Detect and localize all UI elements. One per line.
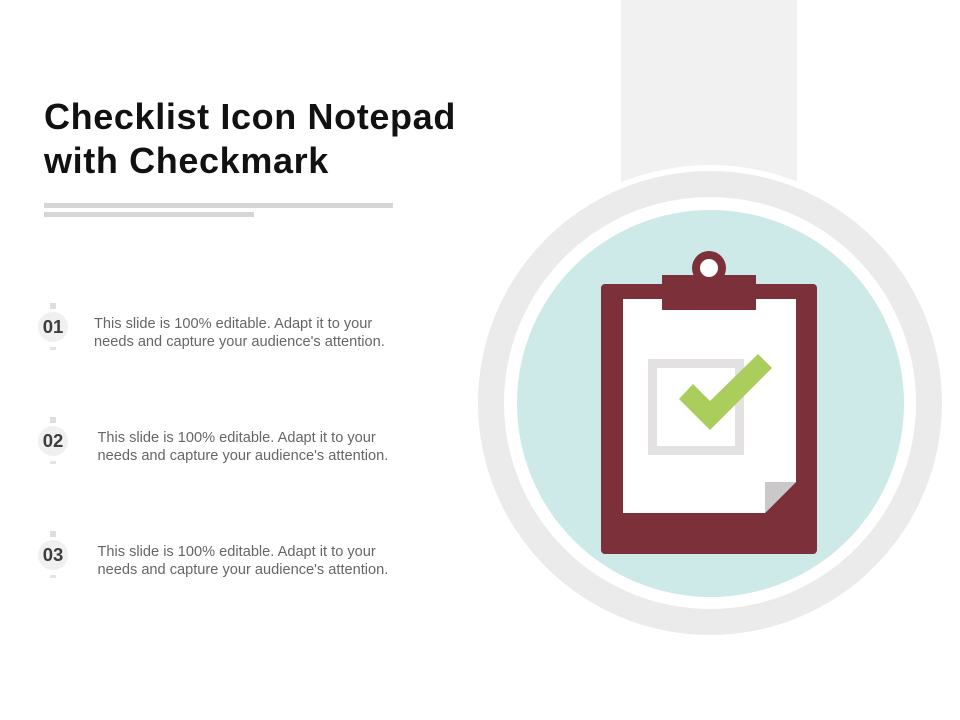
title: Checklist Icon Notepad xyxy=(44,96,456,137)
badge 01 xyxy=(38,312,68,342)
item 03 xyxy=(38,531,388,578)
title underline long xyxy=(44,203,393,208)
paper sheet xyxy=(623,299,796,513)
text 01: needs and capture your audience's attention. xyxy=(94,334,385,350)
item 02 xyxy=(38,417,388,464)
badge 02 xyxy=(38,426,68,456)
badge 03 xyxy=(38,540,68,570)
check mark xyxy=(679,354,772,430)
item 01 xyxy=(38,303,385,350)
clip bar xyxy=(662,275,756,310)
dash bottom xyxy=(50,575,56,578)
white inner ring xyxy=(504,197,916,609)
clip knob xyxy=(692,251,726,285)
dash bottom xyxy=(50,461,56,464)
dash bottom xyxy=(50,347,56,350)
clipboard board xyxy=(601,284,817,554)
clipboard xyxy=(601,251,817,554)
text 01 xyxy=(94,316,385,350)
text 02: This slide is 100% editable. Adapt it to your xyxy=(98,430,376,446)
title xyxy=(44,96,456,181)
text 02 xyxy=(98,430,388,464)
checkbox xyxy=(648,359,744,455)
clip hole xyxy=(700,259,718,277)
dash top xyxy=(50,303,56,309)
badge 02: 02 xyxy=(43,430,63,451)
dash top xyxy=(50,531,56,537)
background vertical band xyxy=(621,0,797,200)
title underline short xyxy=(44,212,254,217)
outer grey ring xyxy=(478,171,942,635)
dash top xyxy=(50,417,56,423)
teal circle xyxy=(517,210,904,597)
badge 03: 03 xyxy=(43,544,63,565)
title: with Checkmark xyxy=(44,140,329,181)
white halo around ring xyxy=(472,165,948,641)
text 02: needs and capture your audience's attention. xyxy=(98,448,388,464)
badge 01: 01 xyxy=(43,316,63,337)
text 03: needs and capture your audience's attention. xyxy=(98,562,388,578)
text 03: This slide is 100% editable. Adapt it to your xyxy=(98,544,376,560)
paper fold xyxy=(765,482,796,513)
text 03 xyxy=(98,544,388,578)
text 01: This slide is 100% editable. Adapt it to your xyxy=(94,316,372,332)
